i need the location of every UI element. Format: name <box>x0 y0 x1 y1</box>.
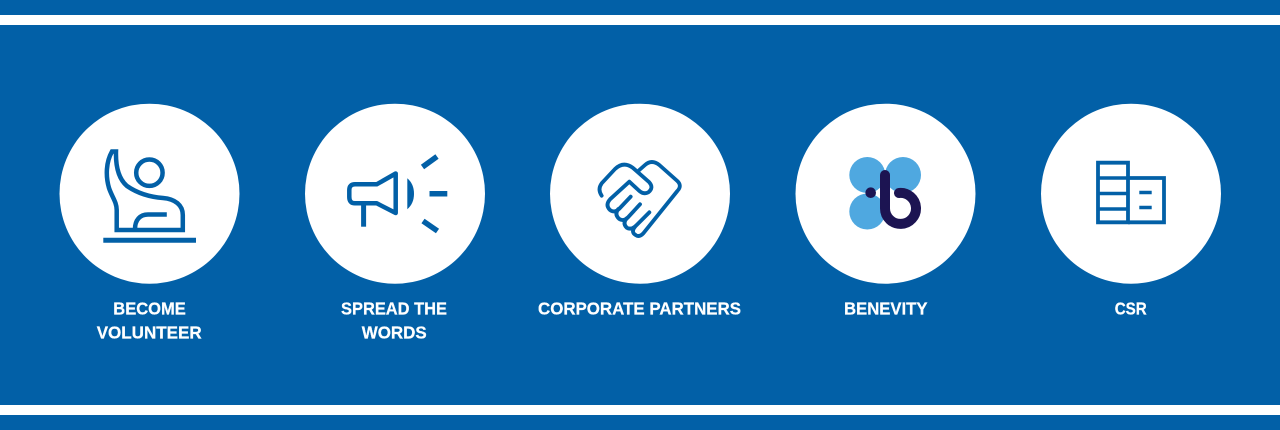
panel: csr <box>1041 104 1221 318</box>
label: spread the words <box>341 298 447 343</box>
icon: benevity logo <box>849 157 921 230</box>
label: spread the words: WORDS <box>362 323 427 343</box>
label: csr: CSR <box>1115 298 1147 318</box>
label: corporate partners: CORPORATE PARTNERS <box>538 298 741 318</box>
label: become volunteer <box>97 298 202 343</box>
circle: corporate partners <box>550 104 730 284</box>
label: become volunteer: VOLUNTEER <box>97 323 202 343</box>
label: become volunteer: BECOME <box>113 298 186 318</box>
panel: benevity <box>796 104 976 318</box>
circle: become volunteer <box>60 104 240 284</box>
panel: spread the words <box>305 104 485 343</box>
label: benevity: BENEVITY <box>844 298 928 318</box>
circle: csr <box>1041 104 1221 284</box>
circle: benevity <box>796 104 976 284</box>
circle: spread the words <box>305 104 485 284</box>
icon: raised hand <box>103 152 196 240</box>
icon: office buildings <box>1098 163 1164 222</box>
icon: handshake <box>599 162 680 236</box>
icon: megaphone <box>349 156 447 231</box>
panel: become volunteer <box>60 104 240 343</box>
label: spread the words: SPREAD THE <box>341 298 447 318</box>
panel: corporate partners <box>538 104 741 318</box>
